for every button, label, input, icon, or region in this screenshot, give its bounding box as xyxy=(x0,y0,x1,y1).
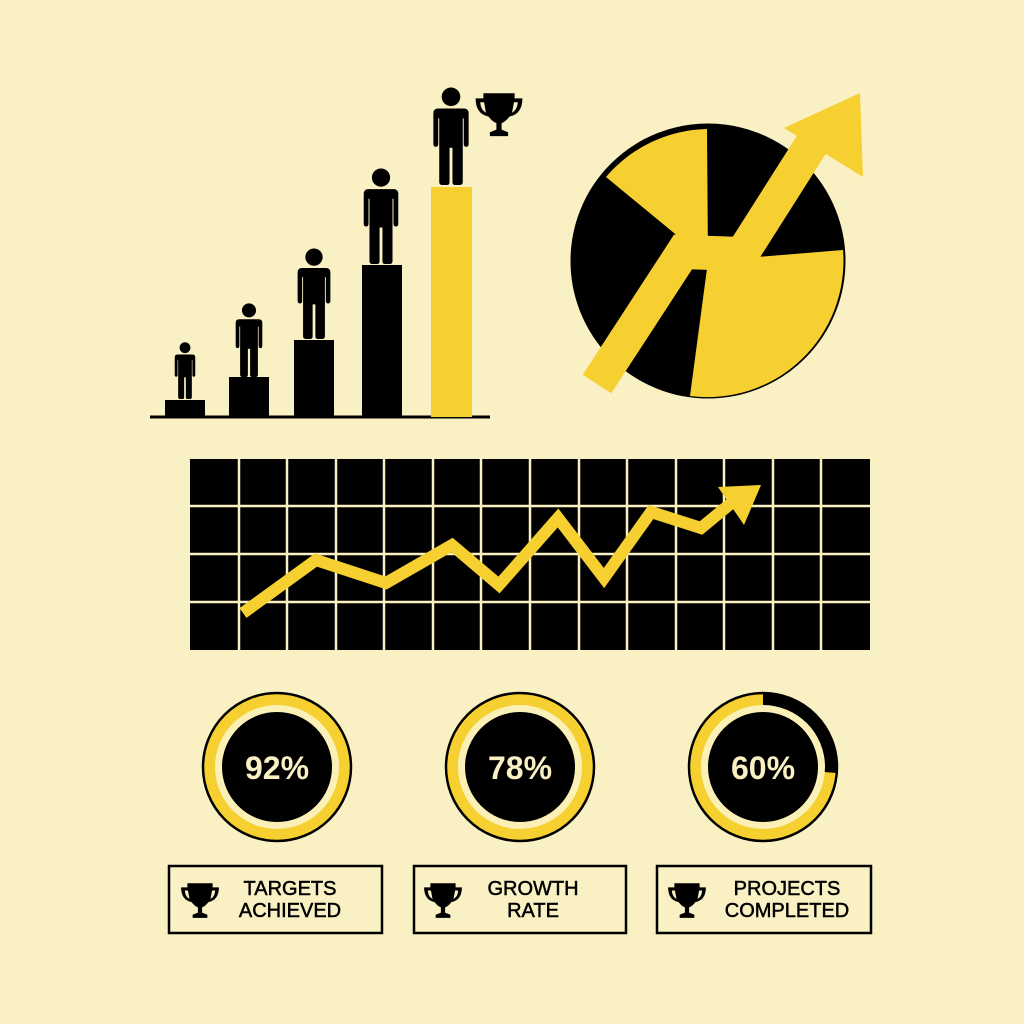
label: projects completed: PROJECTS xyxy=(734,878,840,900)
gauge: 92% xyxy=(203,693,351,841)
icon: trophy above top bar xyxy=(476,93,522,136)
label: targets achieved: ACHIEVED xyxy=(239,900,341,922)
label: projects completed: COMPLETED xyxy=(725,900,849,922)
label: targets achieved xyxy=(169,866,382,933)
bar chart: people on podium bars xyxy=(150,87,490,417)
gauge: 78% xyxy=(446,693,594,841)
trend line arrow xyxy=(243,485,761,613)
label: growth rate xyxy=(414,866,626,933)
label: targets achieved: TARGETS xyxy=(244,878,336,900)
label: growth rate: RATE xyxy=(507,900,559,922)
line chart grid xyxy=(190,459,870,650)
pie chart with rising arrow xyxy=(572,93,863,397)
gauge: 92%: 92% xyxy=(245,750,309,786)
label: growth rate: GROWTH xyxy=(487,878,579,900)
gauge: 60%: 60% xyxy=(731,750,795,786)
label: projects completed xyxy=(657,866,871,933)
gauge: 78%: 78% xyxy=(488,750,552,786)
gauge: 60% xyxy=(689,693,837,841)
